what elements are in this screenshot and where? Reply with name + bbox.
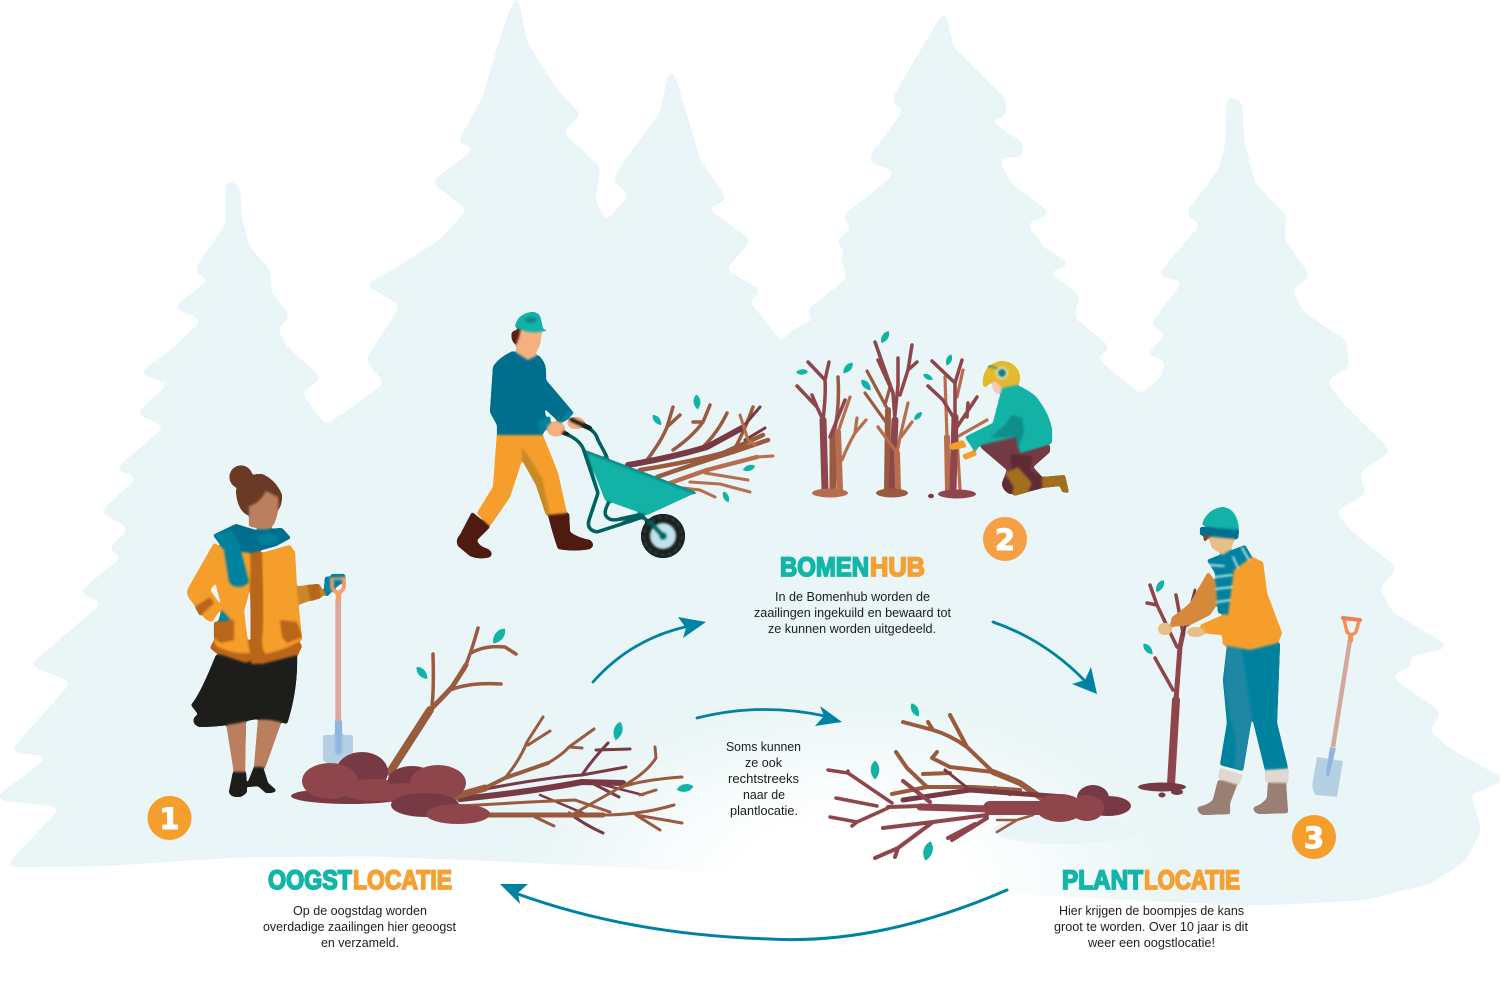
- wheelbarrow frame: [563, 422, 663, 536]
- cuff: [307, 584, 321, 601]
- wheelbarrow tray: [587, 452, 695, 515]
- lying branches: brown: [450, 717, 682, 830]
- sweater: [490, 351, 573, 435]
- section 2: heading and text: [754, 552, 951, 636]
- section 1: uprooted trees on mound: [291, 626, 694, 833]
- shortcut text: ze ook: [745, 755, 782, 770]
- lying branches: maroon: [460, 743, 643, 833]
- section 1: number badge: 1: [159, 802, 180, 836]
- section 1: woman with spade: [187, 466, 353, 797]
- section 2: heading and text: BOMEN: [780, 552, 869, 582]
- arm cuff: [195, 597, 214, 616]
- cap: [515, 312, 553, 332]
- mound: [291, 752, 490, 824]
- spade: [323, 574, 353, 771]
- cuffs: [1218, 768, 1289, 785]
- section 2: planted young trees: [796, 329, 987, 498]
- boots: [1198, 780, 1288, 815]
- jacket hem: [210, 640, 302, 664]
- trousers: [980, 436, 1050, 494]
- section 1: heading and text: [263, 865, 456, 950]
- section 1: number badge: [148, 796, 192, 840]
- jacket left panel: [214, 548, 250, 653]
- sweater shadow: [990, 415, 1024, 450]
- far hand: [1158, 623, 1172, 635]
- hair: [230, 466, 282, 516]
- background: white fade in the centre: [510, 690, 1190, 1003]
- section 3: planting person: [1158, 507, 1289, 815]
- jacket inner: [250, 552, 263, 664]
- arrow: hub to planting site: [993, 622, 1097, 694]
- shortcut text: naar de: [743, 787, 785, 802]
- section 2: number badge: [983, 517, 1027, 561]
- section 3: heading and text: Hier krijgen de boompjes de kans: [1059, 903, 1244, 918]
- shortcut text: [726, 739, 801, 818]
- sweater: [965, 385, 1052, 453]
- leaves: [871, 702, 935, 862]
- legs: [226, 720, 282, 773]
- near hand: [1187, 627, 1205, 637]
- section 3: number badge: [1292, 815, 1336, 859]
- cuffs: [537, 410, 574, 433]
- leaves: [414, 626, 694, 793]
- far arm: [292, 584, 326, 607]
- section 1: heading and text: Op de oogstdag worden: [293, 903, 427, 918]
- near arm: [187, 543, 226, 622]
- shortcut text: Soms kunnen: [726, 739, 801, 754]
- earmuffs: [988, 366, 1008, 379]
- section 3: number badge: 3: [1304, 821, 1324, 855]
- section 2: branches in wheelbarrow: [628, 394, 773, 504]
- arrow: planting site back to harvest: [500, 884, 1007, 940]
- arrow: harvest to hub: [593, 617, 706, 682]
- arrow: harvest direct to planting site: [697, 706, 842, 726]
- tree three: [928, 360, 987, 498]
- leaves: [796, 329, 954, 422]
- hair: [1203, 533, 1215, 542]
- jeans shading: [1224, 645, 1252, 770]
- section 2: heading and text: ze kunnen worden uitgedeeld.: [768, 621, 936, 636]
- section 3: trees on the ground: [828, 702, 1131, 862]
- hat: [1200, 507, 1239, 539]
- far arm: [1170, 572, 1220, 627]
- face: [992, 379, 1004, 394]
- hand in pocket: [218, 610, 231, 622]
- scarf: [213, 524, 291, 587]
- section 3: heading and text: [1054, 865, 1248, 950]
- root ball: [1036, 785, 1131, 822]
- section 1: heading and text: en verzameld.: [321, 935, 399, 950]
- jeans: [1220, 643, 1288, 771]
- ground shadows: [415, 815, 1137, 844]
- section 3: heading and text: weer een oogstlocatie!: [1087, 935, 1215, 950]
- section 3: heading and text: PLANT: [1062, 865, 1143, 895]
- section 2: kneeling woman: [948, 361, 1069, 496]
- section 2: heading and text: In de Bomenhub worden de: [775, 589, 930, 604]
- section 1: heading and text: LOCATIE: [353, 865, 452, 895]
- trouser folds: [522, 447, 550, 515]
- section 1: heading and text: OOGST: [268, 865, 352, 895]
- face: [1208, 535, 1235, 555]
- tree one: [797, 362, 866, 498]
- boots: [1005, 467, 1069, 496]
- shortcut text: rechtstreeks: [728, 771, 799, 786]
- section 1: heading and text: overdadige zaailingen hier geoogst: [263, 919, 456, 934]
- sweater: [1200, 557, 1282, 650]
- leaves: [651, 394, 756, 504]
- shoes: [229, 767, 276, 797]
- section 2: heading and text: zaailingen ingekuild en bewaard tot: [754, 605, 951, 620]
- tree two: [865, 342, 917, 498]
- wheel: [641, 514, 685, 558]
- section 3: heading and text: LOCATIE: [1144, 865, 1240, 895]
- shortcut text: plantlocatie.: [730, 803, 798, 818]
- hair: [512, 328, 521, 345]
- section 3: heading and text: groot te worden. Over 10 jaar is dit: [1054, 919, 1248, 934]
- section 2: heading and text: HUB: [870, 552, 925, 582]
- section 2: number badge: 2: [995, 523, 1015, 557]
- trousers: [477, 433, 567, 526]
- hair: [983, 361, 1020, 389]
- pockets: [214, 620, 302, 643]
- section 2: man with wheelbarrow: [457, 312, 695, 558]
- grips and hands: [547, 417, 590, 436]
- glove: [324, 575, 345, 597]
- section 3: young tree being planted: [1138, 578, 1202, 798]
- section 3: spade: [1312, 618, 1360, 797]
- scarf: [1207, 545, 1252, 615]
- gloves: [948, 440, 977, 460]
- upright branches: [390, 628, 516, 772]
- skirt: [191, 655, 297, 727]
- neck and face: [515, 330, 542, 361]
- boots: [457, 512, 593, 558]
- face and neck: [249, 491, 278, 531]
- jacket right panel: [262, 545, 302, 654]
